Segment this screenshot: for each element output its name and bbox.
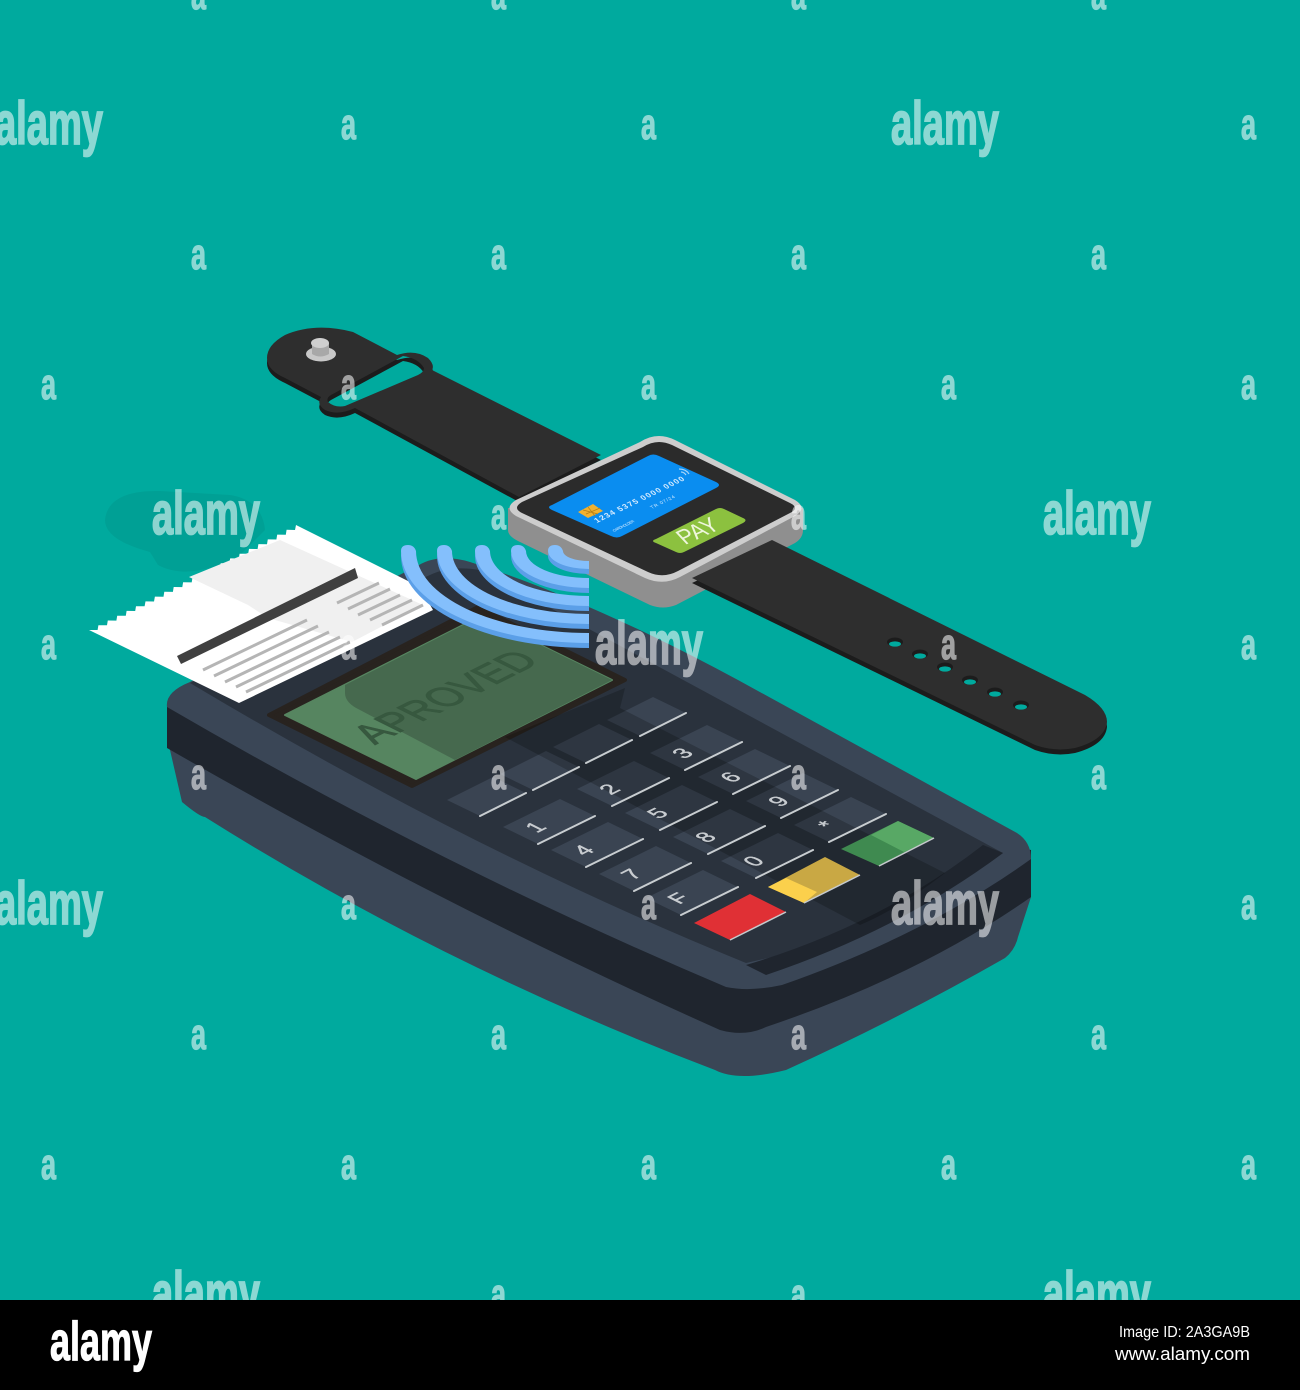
strap stud (306, 338, 336, 362)
key digits: 8 (689, 829, 722, 846)
screen bezel (269, 607, 625, 786)
faint shadow blob (105, 491, 265, 572)
key digits: 1 (519, 819, 552, 836)
watermark small letters: a (191, 230, 206, 279)
watermark small letters: a (341, 880, 356, 929)
payment terminal (167, 558, 1031, 1076)
watermark large words: alamy (891, 870, 999, 937)
watermark small letters: a (791, 1270, 806, 1319)
key digits: 2 (593, 781, 626, 798)
watch bezel (510, 436, 802, 582)
watermark small letters: a (191, 750, 206, 799)
receipt long lines (203, 620, 350, 692)
watermark small letters: a (1241, 620, 1256, 669)
contactless waves (401, 545, 589, 648)
key digits: * (811, 818, 842, 833)
watermark small letters: a (791, 750, 806, 799)
footer bar (0, 1300, 1300, 1390)
watermark small letters: a (341, 100, 356, 149)
watermark small letters: a (1091, 750, 1106, 799)
key edge highlights (480, 713, 886, 915)
watermark large words: alamy (152, 480, 260, 547)
watermark small letters: a (41, 360, 56, 409)
watermark small letters: a (791, 230, 806, 279)
pay button (653, 508, 746, 553)
watch shadow across keypad (505, 688, 945, 925)
watermark small letters: a (1091, 1010, 1106, 1059)
terminal top surface (167, 558, 1031, 989)
wave 3 (475, 545, 589, 611)
watermark small letters: a (641, 1140, 656, 1189)
smartwatch (508, 436, 803, 608)
screen (285, 616, 612, 779)
watermark small letters: a (641, 880, 656, 929)
keypad panel (190, 568, 1003, 963)
credit card on display (549, 454, 719, 538)
wave 4 (511, 545, 589, 593)
watch strap upper (267, 328, 601, 502)
watermark small letters: a (341, 360, 356, 409)
key digits (519, 745, 842, 907)
watermark small letters: a (941, 620, 956, 669)
watermark large words (0, 90, 1151, 1327)
watermark small letters: a (41, 620, 56, 669)
footer logo: alamy (50, 1310, 152, 1372)
watermark large words: alamy (0, 870, 103, 937)
strap face (692, 540, 1107, 749)
watermark small letters: a (341, 1140, 356, 1189)
watermark small letters: a (341, 620, 356, 669)
red key (694, 894, 786, 940)
watermark small letters: a (491, 750, 506, 799)
watermark small letters: a (1241, 360, 1256, 409)
card holder: CARDHOLDER (611, 519, 636, 533)
watermark large words: alamy (1043, 1260, 1151, 1327)
strap holes (887, 638, 1029, 710)
card number: 1234 5375 0000 0000 (592, 475, 687, 524)
watermark large words: alamy (595, 610, 703, 677)
key digits: 7 (615, 866, 648, 883)
yellow key (768, 857, 860, 903)
watch strap lower (692, 540, 1107, 754)
watermark large words: alamy (152, 1260, 260, 1327)
key digits: 6 (714, 769, 747, 786)
watermark small letters: a (941, 360, 956, 409)
receipt shaded fold (189, 540, 423, 642)
card chip (578, 504, 603, 518)
watermark large words: alamy (1043, 480, 1151, 547)
watermark small letters: a (491, 490, 506, 539)
watermark large words: alamy (0, 90, 103, 157)
strap thickness (267, 333, 601, 502)
terminal dark side band (167, 705, 1031, 1033)
dark stripe on panel (746, 845, 1003, 975)
key digits: 0 (737, 853, 770, 870)
pay label: PAY (671, 513, 726, 549)
key digits: 3 (666, 745, 699, 762)
watermark small letters: a (1241, 100, 1256, 149)
watermark small letters: a (1241, 1140, 1256, 1189)
wave 5 (548, 545, 589, 574)
watch case side (508, 508, 803, 608)
key digits: 5 (641, 805, 674, 822)
key digits: F (661, 890, 696, 907)
key digits: 4 (567, 842, 600, 859)
watermark small letters: a (791, 490, 806, 539)
watermark small letters: a (491, 1010, 506, 1059)
contactless mark (679, 469, 689, 475)
card expiry: TR 07/24 (649, 495, 677, 510)
keypad (447, 688, 945, 940)
receipt dark bar (177, 568, 358, 664)
watermark large words: alamy (891, 90, 999, 157)
key digits: 9 (762, 793, 795, 810)
watermark small letters: a (791, 1010, 806, 1059)
watermark small letters: a (191, 1010, 206, 1059)
key faces (447, 697, 886, 915)
watermark small letters: a (941, 1140, 956, 1189)
website: www.alamy.com (1114, 1344, 1250, 1364)
image id: Image ID: 2A3GA9B (1119, 1324, 1250, 1341)
watermark small letters: a (41, 1140, 56, 1189)
watch display (517, 442, 795, 575)
strap thickness (692, 545, 1107, 754)
green key (841, 821, 934, 866)
receipt short lines (337, 583, 423, 625)
wave 1 (401, 545, 589, 648)
watermark small letters: a (491, 1270, 506, 1319)
watermark small letters: a (1091, 230, 1106, 279)
watermark small letters: a (491, 230, 506, 279)
receipt (89, 525, 433, 703)
wave 2 (437, 545, 589, 629)
terminal base (168, 745, 1031, 1076)
approved text: APROVED (341, 645, 550, 749)
watermark small letters: a (641, 100, 656, 149)
receipt paper (89, 525, 433, 703)
watermark small letters: a (1241, 880, 1256, 929)
strap face (267, 328, 601, 497)
watermark small letters: a (641, 360, 656, 409)
